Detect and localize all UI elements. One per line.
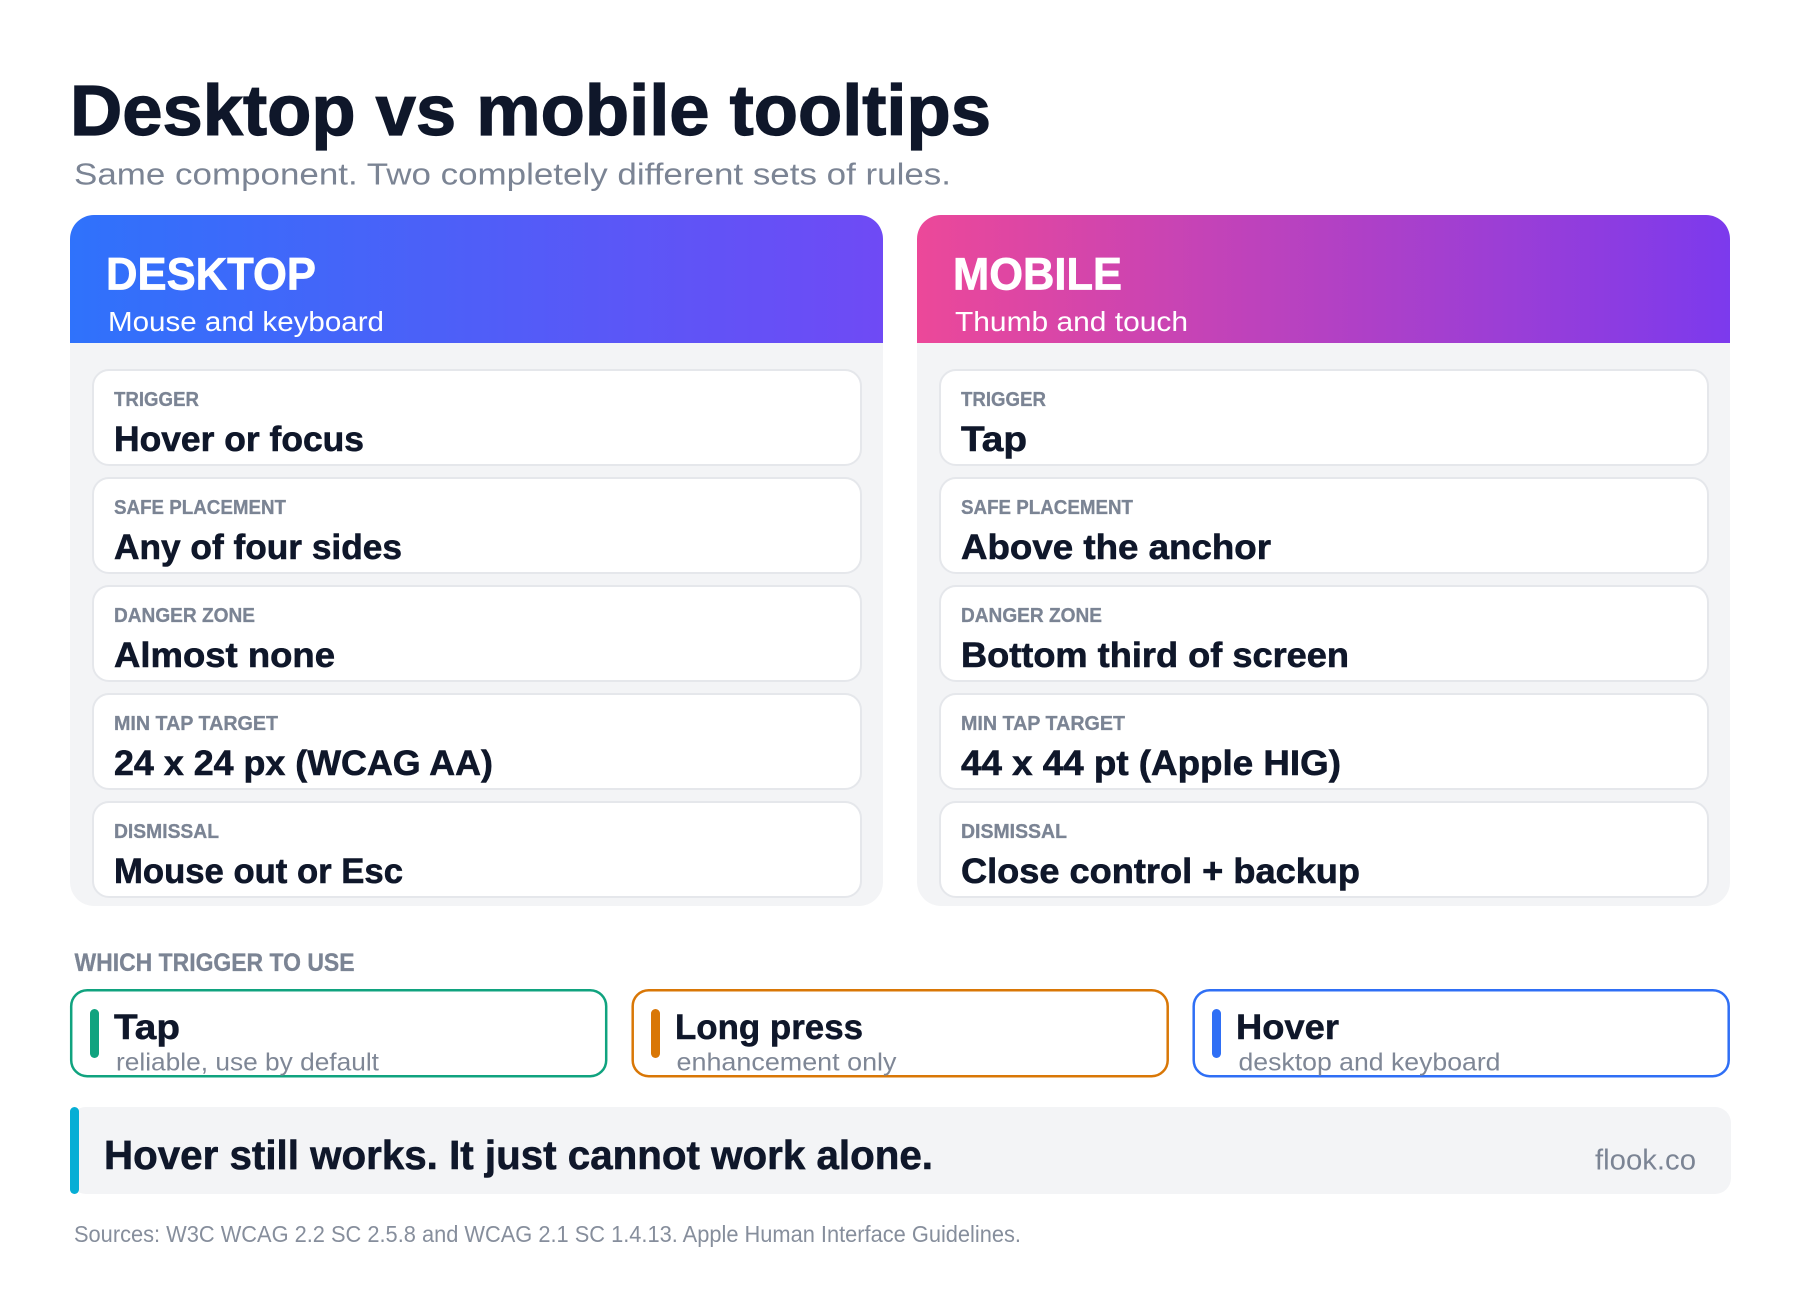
row: dismissal: [940, 802, 1708, 897]
row: safe placement: [93, 478, 861, 573]
row: trigger: [93, 370, 861, 465]
row: safe placement: Above the anchor: [961, 528, 1271, 567]
trigger card: long press: Long press: [675, 1008, 863, 1047]
row: danger zone: [93, 586, 861, 681]
panel: desktop: [70, 215, 883, 906]
row: trigger: TRIGGER: [114, 389, 200, 411]
subtitle: Same component. Two completely different sets of rules.: [74, 156, 951, 192]
row: trigger: Tap: [961, 420, 1027, 459]
row: danger zone: Almost none: [114, 636, 335, 675]
row: dismissal: DISMISSAL: [114, 821, 219, 843]
row: min tap target: MIN TAP TARGET: [114, 713, 278, 735]
row: safe placement: [940, 478, 1708, 573]
section heading: which trigger to use: WHICH TRIGGER TO USE: [74, 949, 354, 977]
accent bar: [1212, 1009, 1221, 1058]
panel background: [917, 215, 1730, 906]
trigger card: tap: reliable, use by default: [116, 1048, 379, 1076]
mobile header: MOBILE: [953, 248, 1122, 300]
row: trigger: [940, 370, 1708, 465]
mobile header: Thumb and touch: [955, 306, 1188, 337]
row: safe placement: Any of four sides: [114, 528, 402, 567]
trigger card: hover: Hover: [1236, 1008, 1339, 1047]
row: trigger: TRIGGER: [961, 389, 1047, 411]
trigger card: tap: Tap: [114, 1008, 180, 1047]
row: safe placement: SAFE PLACEMENT: [114, 497, 286, 519]
trigger card: hover: desktop and keyboard: [1238, 1048, 1500, 1076]
row: dismissal: DISMISSAL: [961, 821, 1067, 843]
mobile header: [917, 215, 1730, 343]
row: dismissal: Close control + backup: [961, 852, 1360, 891]
desktop header: DESKTOP: [106, 248, 316, 300]
trigger card: tap: [71, 990, 606, 1076]
desktop header: [70, 215, 883, 343]
row: danger zone: DANGER ZONE: [961, 605, 1102, 627]
callout accent bar: [70, 1107, 79, 1194]
callout: flook.co: [1595, 1144, 1696, 1176]
row: danger zone: DANGER ZONE: [114, 605, 255, 627]
panel: mobile: [917, 215, 1730, 906]
row: dismissal: Mouse out or Esc: [114, 852, 403, 891]
trigger card: long press: enhancement only: [676, 1048, 897, 1076]
row: min tap target: 24 x 24 px (WCAG AA): [114, 744, 493, 783]
panel background: [70, 215, 883, 906]
callout: Hover still works. It just cannot work alone.: [104, 1132, 933, 1178]
title: Desktop vs mobile tooltips: [70, 72, 991, 151]
row: safe placement: SAFE PLACEMENT: [961, 497, 1133, 519]
row: danger zone: Bottom third of screen: [961, 636, 1349, 675]
trigger card: long press: [633, 990, 1168, 1076]
row: min tap target: 44 x 44 pt (Apple HIG): [961, 744, 1341, 783]
row: min tap target: [940, 694, 1708, 789]
trigger card: hover: [1194, 990, 1729, 1076]
row: trigger: Hover or focus: [114, 420, 364, 459]
row: min tap target: [93, 694, 861, 789]
row: dismissal: [93, 802, 861, 897]
row: min tap target: MIN TAP TARGET: [961, 713, 1125, 735]
row: danger zone: [940, 586, 1708, 681]
desktop header: Mouse and keyboard: [108, 306, 384, 337]
sources footnote: Sources: W3C WCAG 2.2 SC 2.5.8 and WCAG 2.1 SC 1.4.13. Apple Human Interface Guidelines.: [74, 1221, 1021, 1247]
accent bar: [651, 1009, 660, 1058]
callout: [70, 1107, 1731, 1194]
accent bar: [90, 1009, 99, 1058]
